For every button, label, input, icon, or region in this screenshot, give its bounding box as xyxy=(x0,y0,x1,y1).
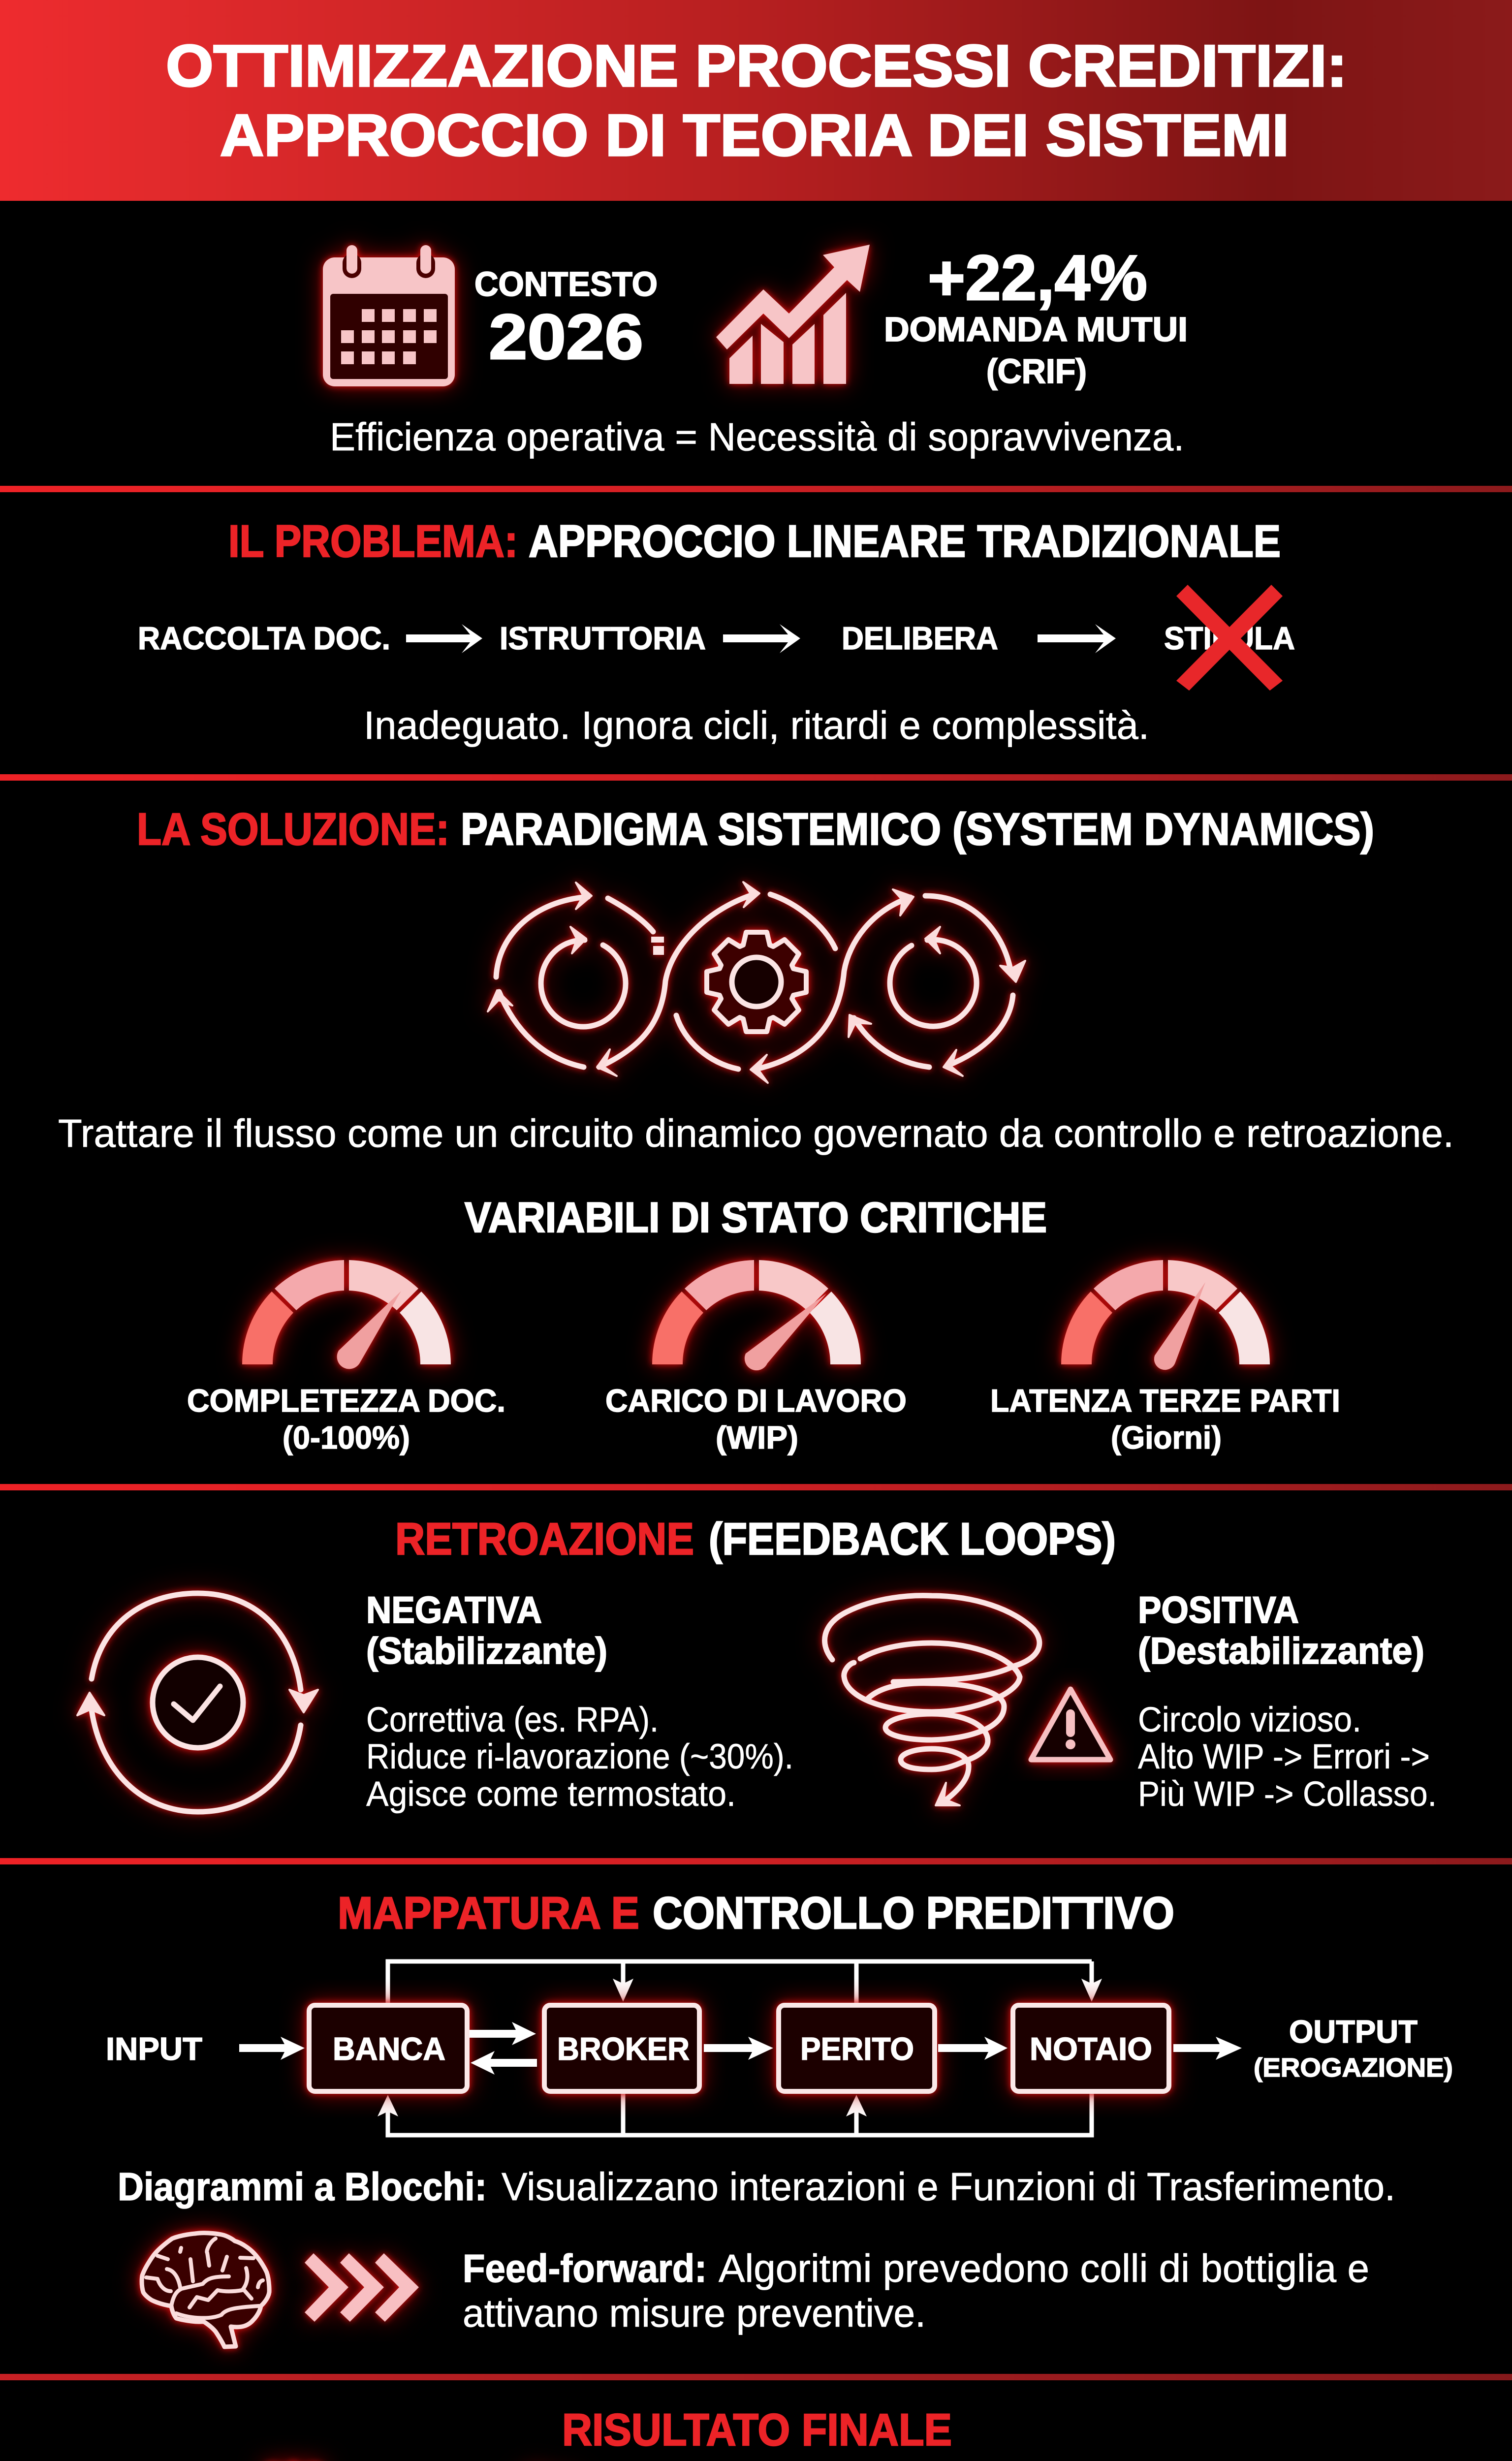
text: negativa: Riduce ri-lavorazione (~30%). xyxy=(366,1737,793,1776)
gauge: carico di lavoro xyxy=(652,1260,861,1370)
heading: mappatura: CONTROLLO PREDITTIVO xyxy=(653,1888,1174,1938)
title: OTTIMIZZAZIONE PROCESSI CREDITIZI: xyxy=(166,33,1347,99)
gear xyxy=(707,932,806,1032)
gauge labels: (WIP) xyxy=(716,1420,798,1455)
stat: +22,4% domanda mutui: +22,4% xyxy=(928,242,1147,314)
diagram labels xyxy=(106,2014,1453,2082)
icon: growth chart xyxy=(716,245,870,384)
heading: retroazione: RETROAZIONE xyxy=(395,1514,694,1564)
heading: risultato finale: RISULTATO FINALE xyxy=(562,2405,952,2455)
icon: system loops with gear xyxy=(488,882,1025,1083)
icon: calendar xyxy=(323,245,455,386)
gauge labels: (Giorni) xyxy=(1111,1420,1222,1455)
gauge labels: LATENZA TERZE PARTI xyxy=(990,1383,1340,1419)
heading: variabili di stato: VARIABILI DI STATO CRITICHE xyxy=(465,1194,1047,1241)
block diagram xyxy=(106,1961,1453,2135)
text: diagrammi a blocchi xyxy=(118,2165,1395,2209)
gauge labels: (0-100%) xyxy=(283,1420,410,1455)
heading: retroazione: (FEEDBACK LOOPS) xyxy=(709,1514,1116,1564)
text: positiva: Circolo vizioso. xyxy=(1138,1701,1361,1739)
text: diagrammi a blocchi: Diagrammi a Blocchi: xyxy=(118,2165,487,2209)
text: negativa: (Stabilizzante) xyxy=(366,1630,607,1672)
diagram labels: BANCA xyxy=(333,2031,445,2067)
text: negativa: Correttiva (es. RPA). xyxy=(366,1701,659,1739)
panel: contesto xyxy=(323,242,1188,459)
text: feed-forward xyxy=(463,2246,1369,2335)
text: feed-forward: attivano misure preventive. xyxy=(463,2291,926,2335)
context label xyxy=(474,265,658,373)
linear flow: ISTRUTTORIA xyxy=(500,620,706,656)
text: negativa: NEGATIVA xyxy=(366,1589,542,1631)
heading: la soluzione: PARADIGMA SISTEMICO (SYSTEM DYNAMICS) xyxy=(461,804,1374,854)
gauge labels: COMPLETEZZA DOC. xyxy=(187,1383,505,1419)
stat: +22,4% domanda mutui: DOMANDA MUTUI xyxy=(884,310,1188,348)
icon: red x xyxy=(1176,585,1283,691)
context label: CONTESTO xyxy=(474,265,658,303)
box: notaio xyxy=(1013,2005,1169,2091)
diagram labels: PERITO xyxy=(800,2031,914,2067)
box: perito xyxy=(779,2005,935,2091)
stat: +22,4% domanda mutui xyxy=(884,242,1188,390)
text: feed-forward: Algoritmi prevedono colli di bottiglia e xyxy=(719,2246,1369,2290)
context label: 2026 xyxy=(489,301,643,373)
icon: tornado xyxy=(825,1596,1040,1805)
linear flow: STIPULA xyxy=(1164,620,1295,656)
heading: retroazione xyxy=(395,1514,1116,1564)
box: broker xyxy=(544,2005,699,2091)
title: APPROCCIO DI TEORIA DEI SISTEMI xyxy=(220,102,1289,168)
panel: mappatura xyxy=(106,1888,1453,2347)
icon: brain xyxy=(142,2233,269,2347)
diagram labels: NOTAIO xyxy=(1030,2031,1152,2067)
text: negativa: Agisce come termostato. xyxy=(366,1775,736,1814)
icon: warning triangle xyxy=(1031,1689,1110,1760)
panel: header banner xyxy=(0,0,1512,201)
text: inadeguato: Inadeguato. Ignora cicli, ritardi e complessità. xyxy=(364,703,1149,747)
diagram labels: BROKER xyxy=(557,2031,690,2067)
panel: il problema xyxy=(138,516,1295,747)
gauge: latenza xyxy=(1061,1260,1270,1370)
text: negativa xyxy=(366,1589,793,1814)
panel: retroazione xyxy=(77,1514,1437,1814)
text: trattare il flusso: Trattare il flusso come un circuito dinamico governato da controllo e retroazione. xyxy=(58,1111,1454,1155)
arrow xyxy=(723,624,800,653)
heading: il problema: APPROCCIO LINEARE TRADIZIONALE xyxy=(529,516,1281,567)
icon: negative feedback loop xyxy=(77,1593,318,1812)
heading: il problema: IL PROBLEMA: xyxy=(228,516,518,567)
text: positiva: POSITIVA xyxy=(1138,1589,1299,1631)
diagram labels: OUTPUT xyxy=(1289,2014,1418,2050)
heading: mappatura xyxy=(338,1888,1174,1938)
gauge labels xyxy=(187,1383,1340,1455)
text: efficienza: Efficienza operativa = Necessità di sopravvivenza. xyxy=(330,415,1184,459)
title xyxy=(166,33,1347,168)
text: positiva xyxy=(1138,1589,1437,1814)
linear flow: DELIBERA xyxy=(842,620,998,656)
text: diagrammi a blocchi: Visualizzano interazioni e Funzioni di Trasferimento. xyxy=(502,2165,1395,2209)
text: positiva: Alto WIP -> Errori -> xyxy=(1138,1737,1430,1776)
diagram labels: INPUT xyxy=(106,2031,202,2067)
linear flow: RACCOLTA DOC. xyxy=(138,620,390,656)
heading: la soluzione xyxy=(137,804,1374,854)
text: positiva: Più WIP -> Collasso. xyxy=(1138,1775,1437,1814)
heading: la soluzione: LA SOLUZIONE: xyxy=(137,804,449,854)
linear flow xyxy=(138,585,1295,691)
gauge: completezza xyxy=(242,1260,451,1369)
flow arrows xyxy=(239,2022,1242,2075)
gauge labels: CARICO DI LAVORO xyxy=(605,1383,907,1419)
diagram labels: (EROGAZIONE) xyxy=(1254,2053,1453,2082)
feedback arrowheads xyxy=(378,1979,1102,2116)
text: positiva: (Destabilizzante) xyxy=(1138,1630,1424,1672)
text: feed-forward: Feed-forward: xyxy=(463,2246,707,2290)
arrow xyxy=(406,624,482,653)
stat: +22,4% domanda mutui: (CRIF) xyxy=(986,352,1087,390)
panel: la soluzione xyxy=(58,804,1454,1455)
arrow xyxy=(1038,624,1116,653)
box: banca xyxy=(309,2005,467,2091)
heading: il problema xyxy=(228,516,1281,567)
heading: mappatura: MAPPATURA E xyxy=(338,1888,639,1938)
icon: chevrons xyxy=(305,2253,419,2322)
